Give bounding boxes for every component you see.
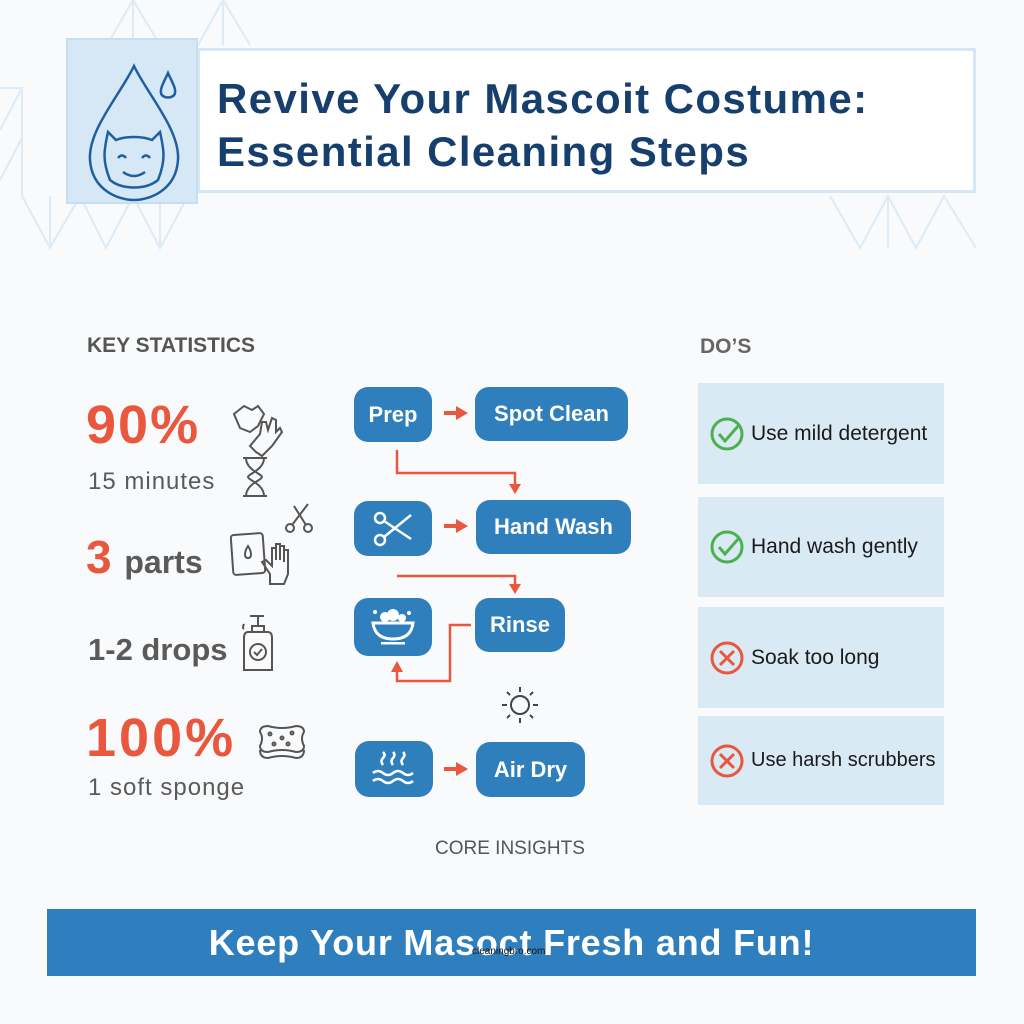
stats column: [86, 395, 313, 801]
heading: do's: DO’S: [700, 335, 751, 358]
title text: Essential Cleaning Steps: [217, 128, 750, 175]
footer banner: [47, 909, 976, 976]
step: air dry: [476, 742, 585, 797]
step: hand wash: [476, 500, 631, 554]
do: hand wash gently: [698, 497, 944, 597]
icon box: waves: [355, 741, 433, 797]
don't: use harsh scrubbers: [698, 716, 944, 805]
step: hand wash: Hand Wash: [494, 514, 613, 539]
icon: sponge: [259, 725, 305, 759]
icon: hourglass: [243, 457, 267, 497]
do: use mild detergent: Use mild detergent: [751, 422, 927, 444]
step: spot clean: Spot Clean: [494, 401, 609, 426]
don't: use harsh scrubbers: Use harsh scrubbers: [751, 749, 936, 771]
step: spot clean: [475, 387, 628, 441]
step: prep: Prep: [369, 402, 417, 426]
do: use mild detergent: [698, 383, 944, 484]
footer banner: Keep Your Masoct Fresh and Fun!: [209, 922, 814, 962]
footer banner: cleaningbro.com: [472, 946, 545, 957]
stat 15 minutes: 15 minutes: [88, 468, 215, 495]
icon box: scissors: [354, 501, 432, 556]
step: air dry: Air Dry: [494, 756, 567, 782]
heading: key statistics: KEY STATISTICS: [87, 334, 255, 357]
icon: soap bottle: [242, 615, 273, 671]
stat 1-2 drops: 1-2 drops: [88, 632, 228, 667]
flowchart: [354, 387, 631, 797]
icon: cloth and glove with scissors: [230, 503, 313, 585]
step: prep: [354, 387, 432, 442]
icon: gloves: [232, 404, 284, 457]
icon box: bowl: [354, 598, 432, 656]
step: rinse: Rinse: [490, 612, 550, 637]
stat 90%: 90%: [86, 395, 200, 455]
title text: Revive Your Mascoit Costume:: [217, 75, 868, 122]
do: hand wash gently: Hand wash gently: [751, 535, 918, 558]
don't: soak too long: [698, 607, 944, 708]
stat 3 parts: 3 parts: [86, 531, 203, 583]
icon: mascot water drop: [66, 38, 198, 204]
stat 100%: 100%: [86, 708, 236, 768]
label: core insights: CORE INSIGHTS: [435, 838, 585, 859]
icon: sun: [502, 687, 538, 723]
title white box: [197, 48, 976, 193]
don't: soak too long: Soak too long: [751, 646, 879, 668]
title text: [217, 75, 868, 175]
step: rinse: [475, 598, 565, 652]
title banner: [66, 38, 976, 204]
stat 1 soft sponge: 1 soft sponge: [88, 774, 245, 801]
